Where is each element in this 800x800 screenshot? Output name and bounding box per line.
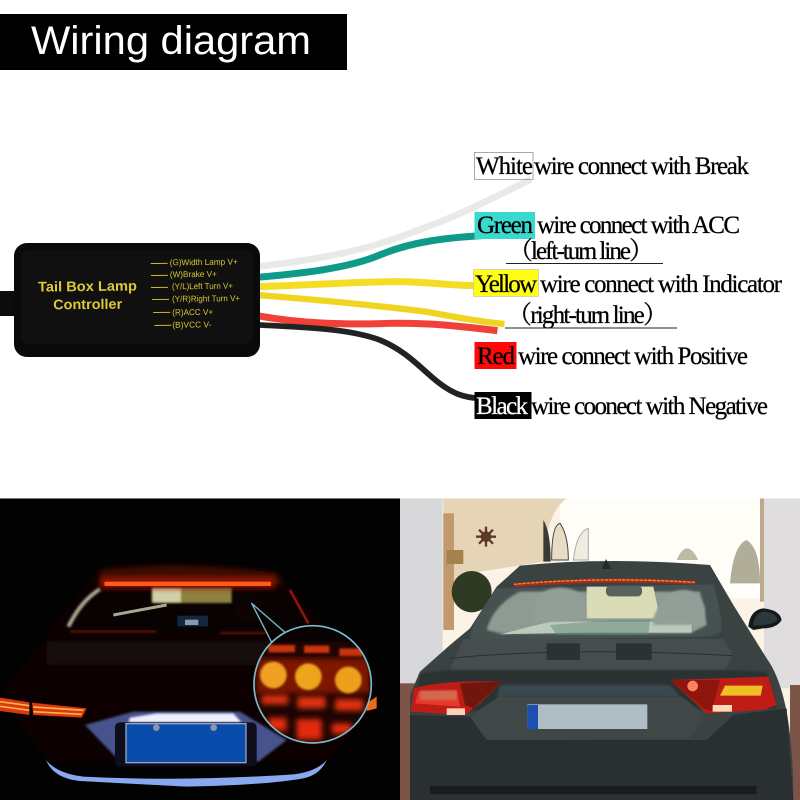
controller title [38,277,137,313]
pin labels: (W)Brake V+ [170,269,217,279]
label: black wire: Black [476,393,528,420]
pin labels: (G)Width Lamp V+ [170,257,238,267]
label: white wire: wire connect with Break [534,153,750,180]
wires [257,179,531,398]
trunk [450,639,733,670]
pin labels [151,257,240,330]
label: white wire: White [476,153,533,180]
cable [0,291,20,316]
rear window [470,584,722,640]
wire: white [257,179,531,267]
lower dark band [410,708,793,800]
title [0,14,347,70]
label: yellow wire [474,270,783,329]
magnifier [252,603,373,743]
label: green wire [474,212,740,265]
label: yellow wire: （right-turn line） [507,301,668,329]
wire: red [259,316,497,331]
right tail light [670,677,777,713]
pillars [400,498,443,685]
antenna [602,559,611,569]
reflected interior lights [152,588,232,603]
plant [452,571,492,612]
high mount stop light [513,578,695,587]
label: red wire: Red [477,343,516,370]
tail light left [0,698,87,718]
controller title: Controller [53,296,123,312]
pin labels: (R)ACC V+ [172,307,213,317]
pin labels: (Y/R)Right Turn V+ [172,293,240,304]
car body [0,563,380,762]
wheel ornament [476,527,496,547]
label: yellow wire: Yellow [475,271,537,298]
side mirror [748,608,782,630]
pin labels: (B)VCC V- [172,319,212,330]
wire: yellow left-turn [257,282,478,287]
photo: car at night [0,498,400,800]
wire: green [257,235,492,277]
label: yellow wire: wire connect with Indicator [540,271,783,298]
title: Wiring diagram [31,19,311,63]
left tail light [411,681,502,715]
background [442,498,790,734]
brake light bar [100,577,275,589]
rear window [67,587,308,632]
wire: yellow right-turn [257,295,504,324]
controller box [0,243,260,357]
license plate [527,704,647,729]
label: green wire: wire connect with ACC [537,212,740,239]
pin labels: (Y/L)Left Turn V+ [172,281,233,291]
label: black wire: wire coonect with Negative [531,393,768,420]
label: green wire: （left-turn line） [508,237,654,265]
car body [410,561,793,800]
lit plate recess [85,712,287,762]
controller title: Tail Box Lamp [38,277,137,295]
bumper light [46,760,327,787]
wire: black [259,325,478,398]
license plate [126,724,246,763]
label: green wire: Green [477,212,534,239]
photo: car in daylight [400,498,800,800]
label: red wire: wire connect with Positive [518,343,748,370]
